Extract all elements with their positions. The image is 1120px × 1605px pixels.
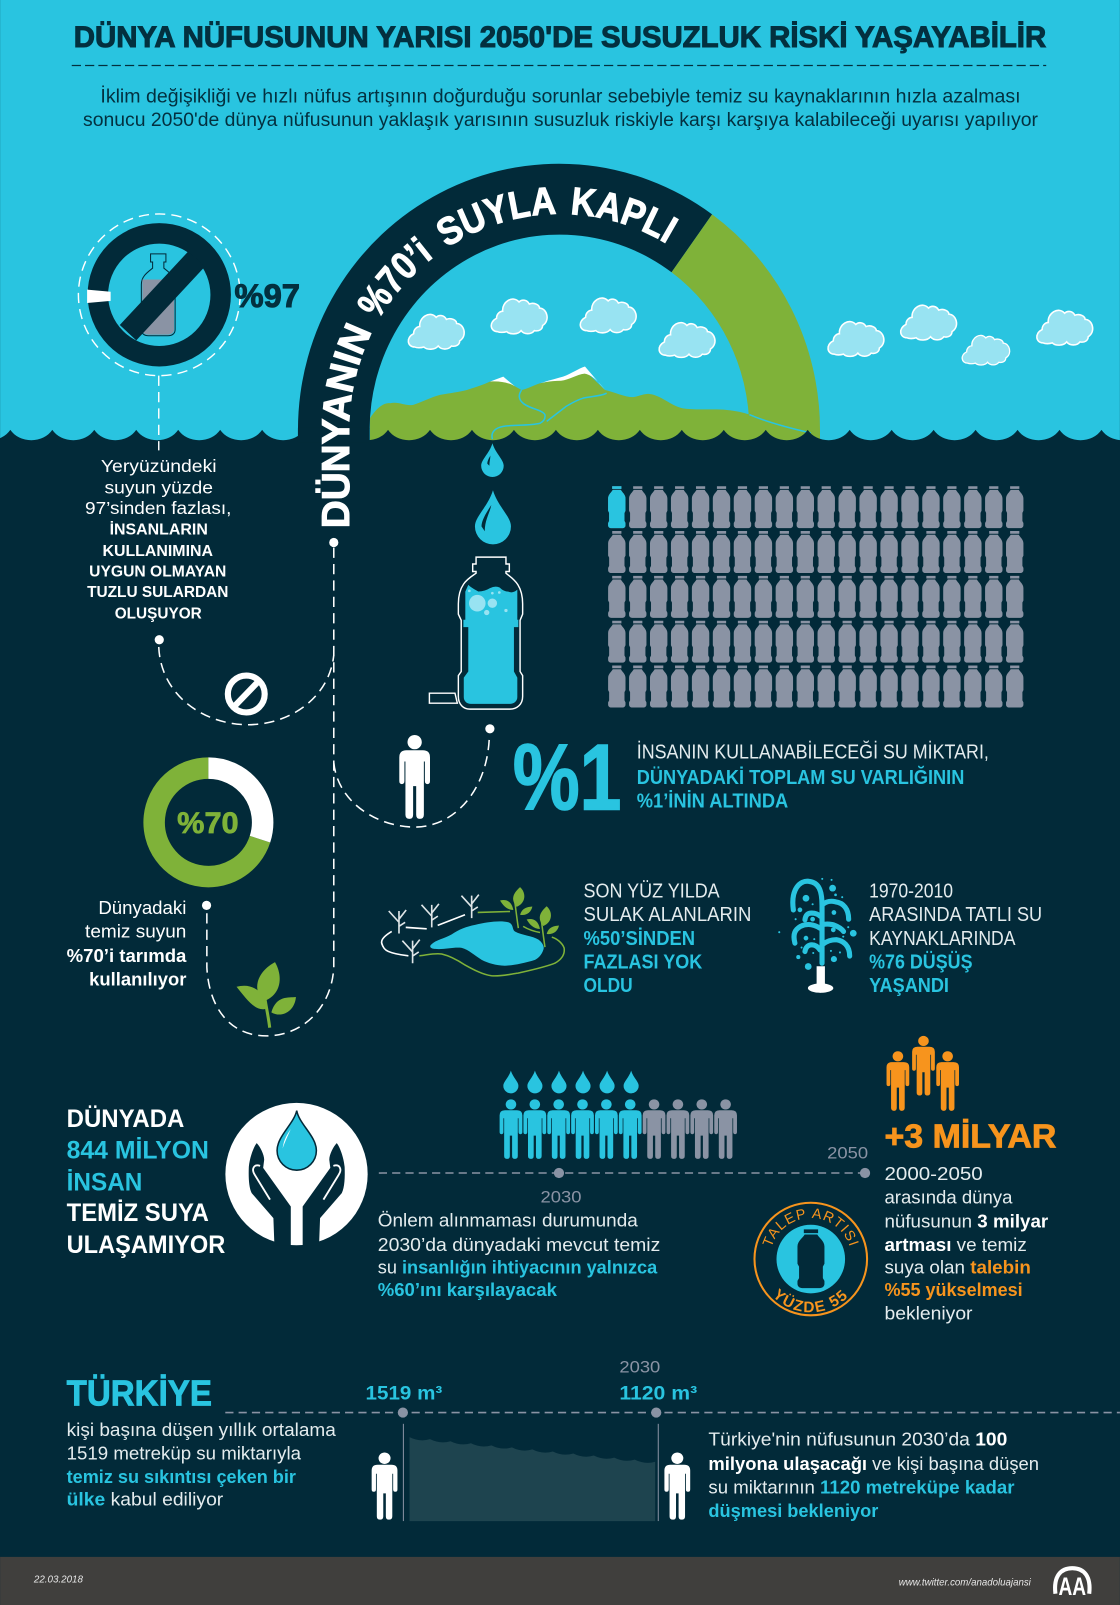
text: 97 percent salt water: OLUŞUYOR xyxy=(115,605,202,622)
curved heading on arch: DÜNYANIN xyxy=(315,322,372,526)
text: freshwater decline: %76 DÜŞÜŞ xyxy=(869,950,973,973)
text: 1 percent usable: İNSANIN KULLANABİLECEĞİ SU MİKTARI, xyxy=(637,740,989,763)
text: freshwater decline: KAYNAKLARINDA xyxy=(869,928,1016,950)
curved heading on arch: SUYLA xyxy=(436,187,556,245)
text: freshwater decline: 1970-2010 xyxy=(869,881,953,903)
rivers xyxy=(492,390,811,439)
text: wetlands: %50’SİNDEN xyxy=(584,927,695,950)
twitter link: www.twitter.com/anadoluajansi xyxy=(899,1578,1032,1589)
icon: no-bottle sign xyxy=(78,214,240,376)
logo: AA xyxy=(1055,1568,1090,1601)
heading: 844 million xyxy=(67,1104,225,1259)
heading: 844 million: DÜNYADA xyxy=(67,1104,184,1133)
text: wetlands: SON YÜZ YILDA xyxy=(584,881,720,903)
heading: 844 million: İNSAN xyxy=(67,1168,142,1196)
water surface: dark sea with scalloped top xyxy=(0,430,1120,1605)
text: freshwater decline xyxy=(869,881,1042,997)
text: 97 percent salt water xyxy=(85,456,231,622)
intro text: sonucu 2050'de dünya nüfusunun yaklaşık yarısının susuzluk riskiyle karşı karşıya kalabileceği uyarısı yapılıyor xyxy=(83,109,1039,131)
donut chart: 70 percent xyxy=(154,768,263,877)
mountain landscape xyxy=(370,371,820,456)
connector dots xyxy=(155,538,494,910)
text: population growth: suya olan talebin xyxy=(884,1256,1031,1277)
intro text: İklim değişikliği ve hızlı nüfus artışının doğurduğu sorunlar sebebiyle temiz su kaynaklarının hızla azalması xyxy=(100,84,1021,107)
text: 2030 projection: Önlem alınmaması durumunda xyxy=(378,1209,639,1230)
text: freshwater decline: ARASINDA TATLI SU xyxy=(869,904,1042,926)
label %97: %97 xyxy=(234,277,300,314)
arch: dark band xyxy=(298,164,712,450)
text: 1 percent usable: %1’İNİN ALTINDA xyxy=(637,790,788,813)
icon: person xyxy=(399,735,430,819)
icon: wetland xyxy=(382,887,564,976)
text: 70 percent agriculture: Dünyadaki xyxy=(98,897,186,918)
right hand xyxy=(303,1143,345,1246)
heading: 844 million: TEMİZ SUYA xyxy=(67,1199,209,1227)
text: wetlands: FAZLASI YOK xyxy=(584,951,703,973)
text: wetlands xyxy=(584,881,751,997)
text: freshwater decline: YAŞANDI xyxy=(869,975,949,997)
icon: big water bottle xyxy=(429,557,523,709)
icon: falling drops xyxy=(475,443,511,544)
text: wetlands: SULAK ALANLARIN xyxy=(584,904,751,926)
text: 70 percent agriculture xyxy=(67,897,187,990)
curved heading on arch xyxy=(315,187,679,526)
pictogram: six drops xyxy=(503,1071,639,1093)
text: 2030 projection: 2030’da dünyadaki mevcut temiz xyxy=(378,1234,660,1255)
timeline: Türkiye: 1120 m³ xyxy=(619,1382,698,1404)
text: population growth xyxy=(884,1163,1048,1323)
icon: plant xyxy=(237,962,296,1028)
title: DÜNYA NÜFUSUNUN YARISI 2050'DE SUSUZLUK RİSKİ YAŞAYABİLİR xyxy=(74,21,1046,54)
pictogram: three orange people xyxy=(887,1036,959,1111)
dashed connectors xyxy=(159,548,489,1036)
icon: small prohibition sign xyxy=(228,676,265,712)
text: Türkiye description: 1519 metreküp su miktarıyla xyxy=(67,1443,302,1464)
arch: green band xyxy=(672,214,820,450)
text: 2030 projection: %60’ını karşılayacak xyxy=(378,1279,558,1300)
clouds xyxy=(408,298,1093,365)
text: population growth: %55 yükselmesi xyxy=(884,1279,1023,1300)
text: population growth: bekleniyor xyxy=(884,1302,973,1323)
text: 70 percent agriculture: kullanılıyor xyxy=(89,969,186,990)
text: 2030 projection xyxy=(378,1209,660,1300)
donut label: %70 xyxy=(177,807,239,840)
pictogram: 100 bottles, 1 highlighted xyxy=(608,486,1023,708)
timeline: Türkiye xyxy=(225,1358,1120,1418)
text: wetlands: OLDU xyxy=(584,975,633,997)
text: Türkiye description xyxy=(67,1419,337,1510)
text: population growth: arasında dünya xyxy=(884,1187,1013,1208)
pictogram: ten people xyxy=(500,1099,737,1159)
text: population growth: artması ve temiz xyxy=(884,1234,1027,1255)
logo: AA: AA xyxy=(1058,1574,1086,1601)
text: Türkiye 2030 forecast: su miktarının 1120 metreküpe kadar xyxy=(708,1476,1014,1497)
heading: 844 million: ULAŞAMIYOR xyxy=(67,1231,225,1259)
timeline: Türkiye: 2030 xyxy=(619,1358,660,1377)
text: population growth: nüfusunun 3 milyar xyxy=(884,1210,1048,1231)
background: sky xyxy=(0,0,1120,450)
footer bar xyxy=(0,1557,1120,1605)
heading: 844 million: 844 MİLYON xyxy=(67,1137,209,1165)
text: 97 percent salt water: KULLANIMINA xyxy=(102,543,213,560)
text: Türkiye 2030 forecast: Türkiye'nin nüfusunun 2030’da 100 xyxy=(708,1428,1007,1449)
text: 97 percent salt water: suyun yüzde xyxy=(104,477,213,497)
badge: demand increase 55 percent: TALEP ARTISI xyxy=(762,1208,859,1246)
drop xyxy=(277,1111,316,1170)
intro text xyxy=(83,84,1039,131)
curved heading on arch: %70’i xyxy=(358,236,433,316)
timeline: world 2030-2050: 2030 xyxy=(541,1188,581,1207)
text: Türkiye 2030 forecast: düşmesi bekleniyor xyxy=(708,1500,878,1521)
text: 70 percent agriculture: temiz suyun xyxy=(85,921,186,942)
heading: Türkiye: TÜRKİYE xyxy=(67,1373,212,1413)
text: Türkiye 2030 forecast: milyona ulaşacağı ve kişi başına düşen xyxy=(708,1453,1039,1474)
text: 1 percent usable: DÜNYADAKİ TOPLAM SU VARLIĞININ xyxy=(637,765,964,789)
text: 97 percent salt water: UYGUN OLMAYAN xyxy=(89,563,226,580)
badge: demand increase 55 percent xyxy=(753,1202,868,1316)
left hand xyxy=(249,1143,291,1246)
text: 2030 projection: su insanlığın ihtiyacının yalnızca xyxy=(378,1256,658,1277)
icon: hands holding drop xyxy=(225,1103,368,1246)
text: 97 percent salt water: İNSANLARIN xyxy=(110,521,208,538)
left arch leg joining sea xyxy=(298,428,370,442)
text: 1 percent usable xyxy=(637,740,989,813)
mountain snow caps xyxy=(490,366,605,390)
text: population growth: 2000-2050 xyxy=(884,1163,983,1184)
text: Türkiye description: kişi başına düşen yıllık ortalama xyxy=(67,1419,337,1440)
text: Türkiye 2030 forecast xyxy=(708,1428,1039,1521)
panel: earth arch with landscape xyxy=(298,164,820,456)
timeline: world 2030-2050 xyxy=(379,1144,870,1207)
curved heading on arch: KAPLI xyxy=(572,187,679,244)
text: 97 percent salt water: 97’sinden fazlası, xyxy=(85,498,231,518)
text: 97 percent salt water: Yeryüzündeki xyxy=(101,456,217,476)
text: Türkiye description: temiz su sıkıntısı çeken bir xyxy=(67,1466,296,1487)
text: Türkiye description: ülke kabul ediliyor xyxy=(67,1489,223,1510)
big number +3 billion: +3 MİLYAR xyxy=(884,1117,1056,1155)
text: 70 percent agriculture: %70’i tarımda xyxy=(67,945,187,966)
chart: per-capita water decline xyxy=(372,1424,690,1521)
bottle in sign xyxy=(141,254,175,336)
text: 97 percent salt water: TUZLU SULARDAN xyxy=(87,584,228,601)
timeline: Türkiye: 1519 m³ xyxy=(366,1382,443,1404)
timeline: world 2030-2050: 2050 xyxy=(827,1144,868,1163)
big number %1: %1 xyxy=(513,725,621,830)
badge: demand increase 55 percent: YÜZDE 55 xyxy=(775,1288,847,1312)
date: 22.03.2018 xyxy=(33,1574,84,1585)
icon: fountain xyxy=(778,878,857,993)
